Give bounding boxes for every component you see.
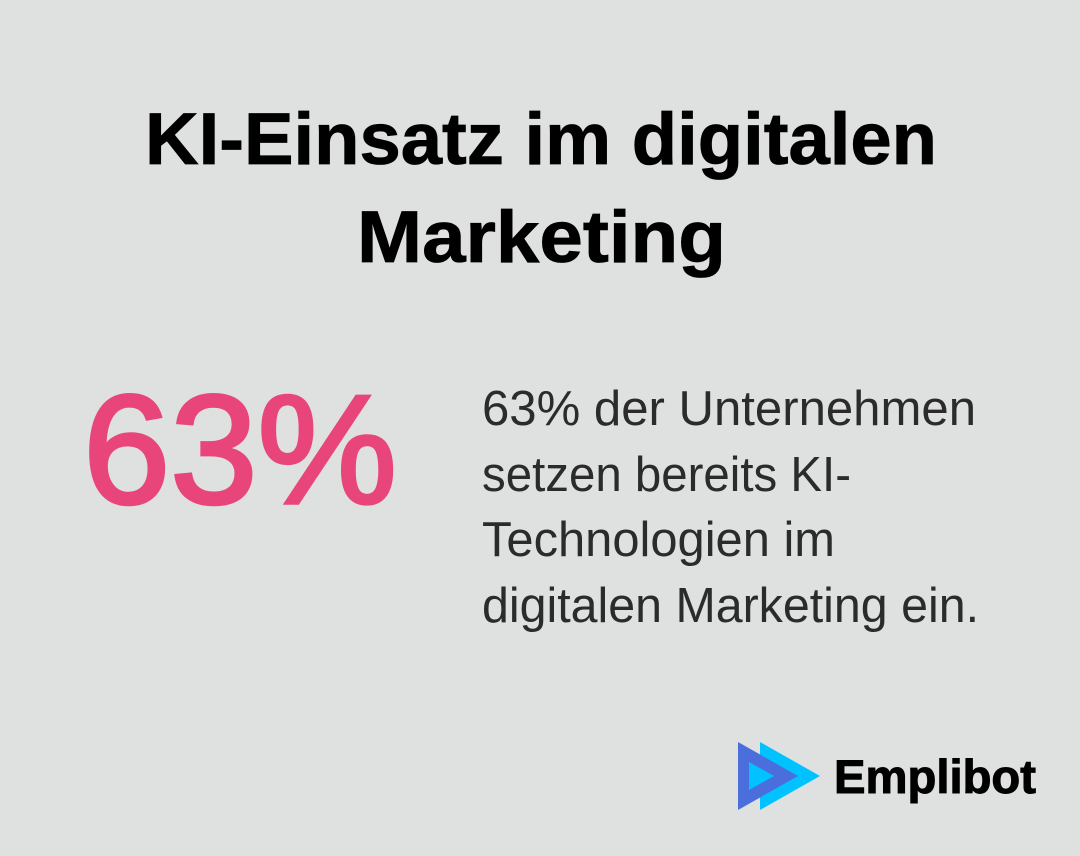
icon: play triangles (738, 742, 820, 810)
title: Marketing (357, 197, 726, 278)
title: KI-Einsatz im digitalen (145, 99, 937, 180)
description text (482, 382, 979, 633)
description text: Technologien im (482, 513, 835, 567)
description text: 63% der Unternehmen (482, 382, 976, 436)
title (145, 99, 937, 278)
big statistic: 63%: 63% (83, 363, 397, 536)
logo: Emplibot (738, 742, 1036, 810)
logo wordmark: Emplibot (834, 750, 1036, 803)
description text: digitalen Marketing ein. (482, 579, 979, 633)
description text: setzen bereits KI- (482, 448, 851, 502)
